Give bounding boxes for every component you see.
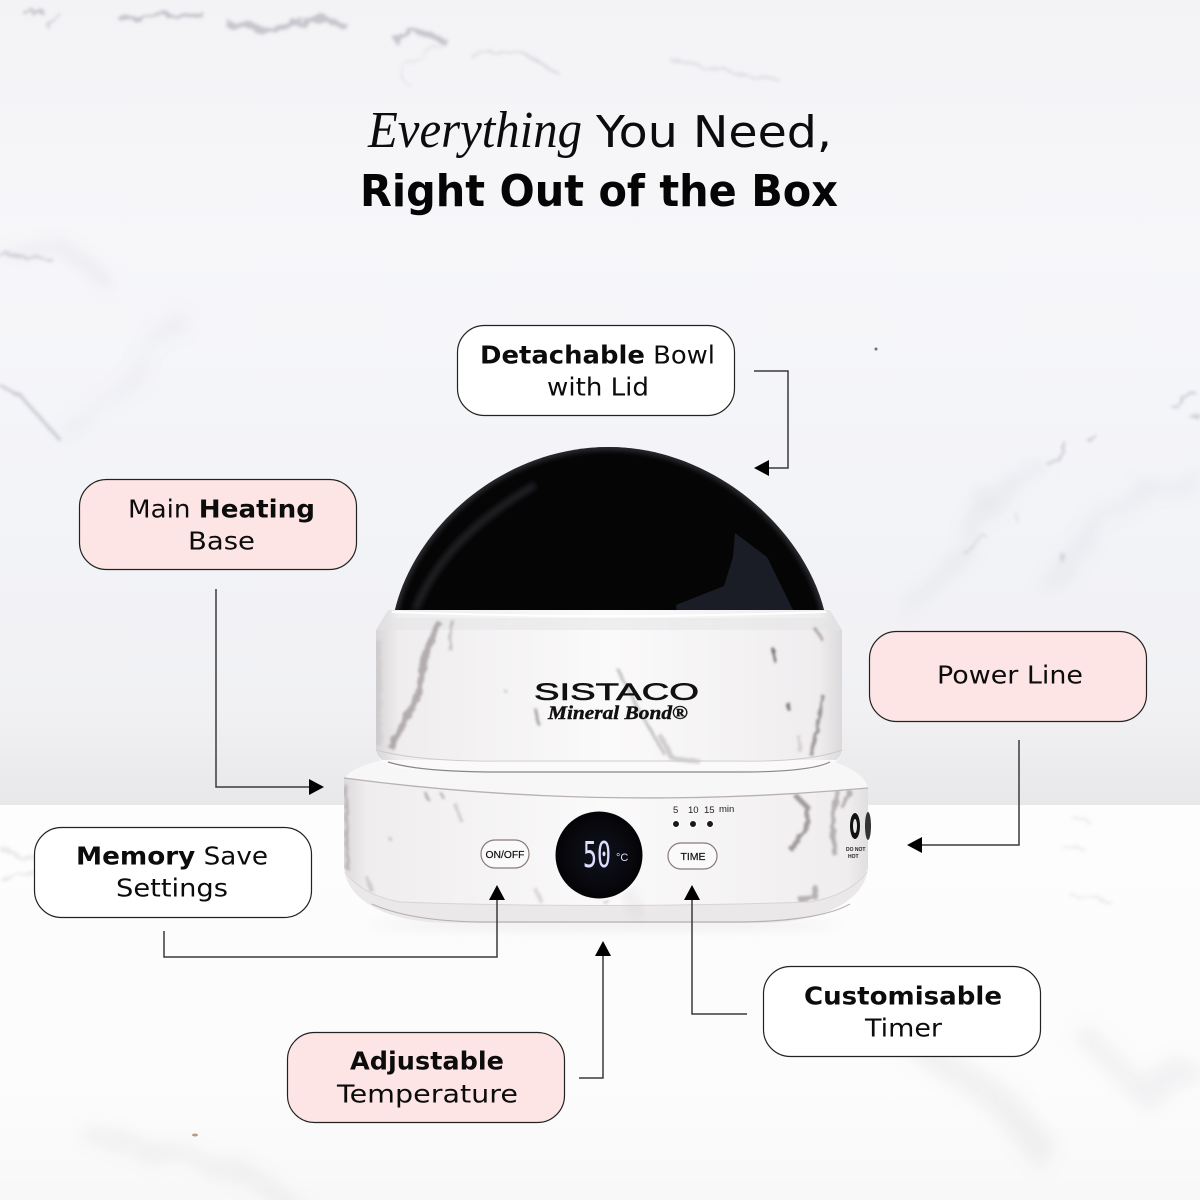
callout: customisable timer [764,966,1040,1056]
callout: memory save settings [34,828,312,918]
arrow: main heating base [216,589,324,795]
callout: detachable bowl [458,326,734,416]
brand logo: Mineral Bond® [547,703,688,724]
ON/OFF button: ON/OFF [486,849,524,861]
arrow: adjustable temperature [579,941,611,1078]
timer indicators [672,804,734,828]
timer indicators: min [719,804,734,815]
TIME button [668,843,717,869]
icon: dome lid [394,447,825,620]
callout: detachable bowl: Detachable Bowl [480,340,715,370]
warning marks: HOT [848,854,859,860]
TIME button: TIME [680,851,706,863]
temperature display: °C [616,852,628,864]
callout: main heating base: Base [188,526,255,556]
callout: memory save settings: Memory Save [76,842,268,870]
ON/OFF button [481,840,529,868]
brand logo: SISTACO [534,679,699,706]
heating base [340,752,875,923]
title [360,102,838,217]
arrow: detachable bowl [754,371,788,476]
brand logo [534,679,699,724]
callout: power line: Power Line [937,660,1083,690]
callout: customisable timer: Customisable [804,982,1002,1010]
timer indicators: 15 [704,805,715,816]
arrow: power line [907,740,1019,853]
timer indicators: 5 [673,805,678,816]
arrow: customisable timer [684,885,747,1014]
callout: main heating base [80,480,356,570]
arrow: memory save [164,885,505,957]
callout: adjustable temperature [288,1032,564,1122]
timer indicators: 10 [688,805,699,816]
temperature display [553,809,645,901]
warning marks [846,812,871,860]
warning marks: DO NOT [846,847,865,853]
title: Right Out of the Box [360,166,838,217]
callout: adjustable temperature: Adjustable [350,1046,504,1076]
temperature display: 50 [583,835,611,876]
title: Everything [367,102,582,159]
callout: adjustable temperature: Temperature [336,1080,518,1108]
callout: main heating base: Main Heating [128,494,315,524]
callout: power line [870,632,1146,722]
callout: memory save settings: Settings [116,874,228,902]
callout: detachable bowl: with Lid [547,372,649,402]
product: wax heater [340,447,875,929]
heating bowl band [376,610,842,772]
callout: customisable timer: Timer [864,1014,943,1042]
title: You Need, [595,107,832,158]
